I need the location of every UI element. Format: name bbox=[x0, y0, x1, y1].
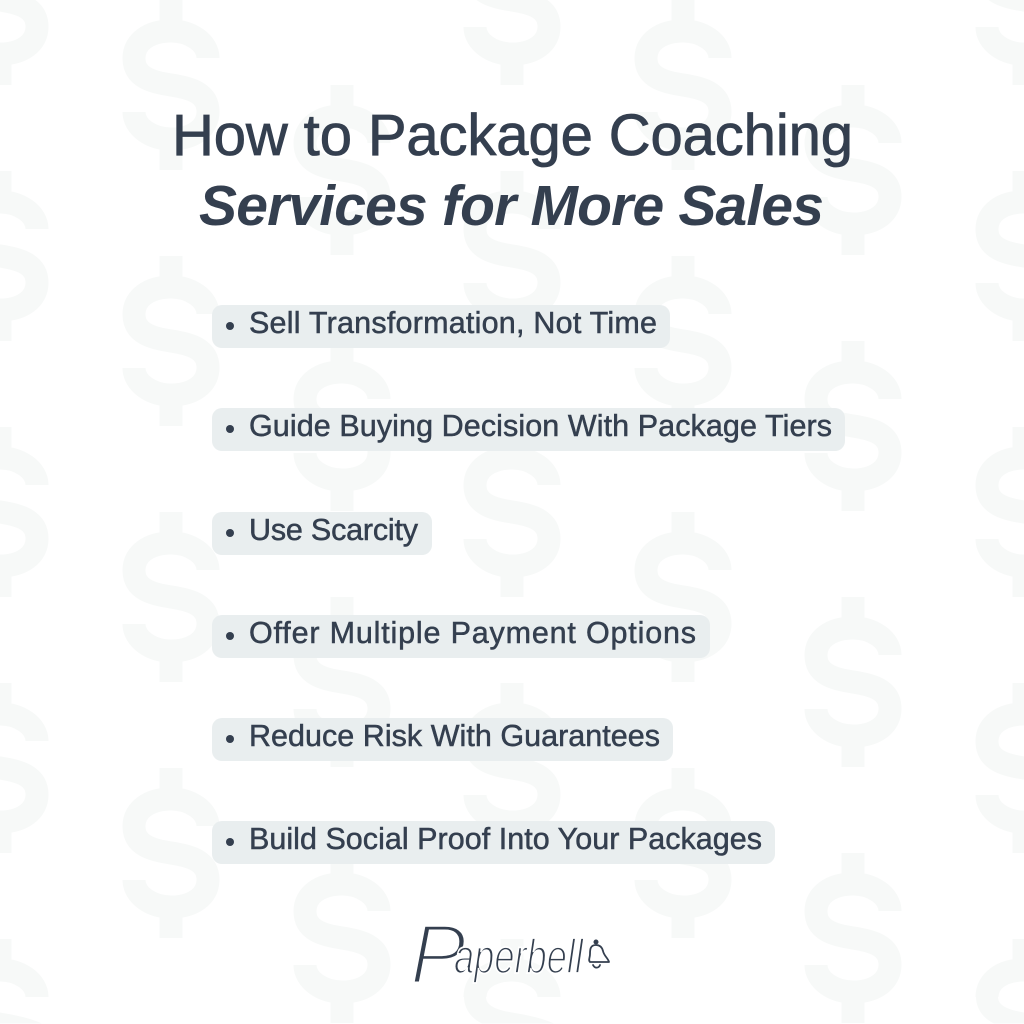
icon: bell bbox=[589, 940, 609, 968]
list item 5: Reduce Risk With Guarantees bbox=[249, 719, 660, 753]
list item 3 bbox=[212, 512, 432, 555]
bullet list bbox=[212, 305, 845, 864]
list item 4: Offer Multiple Payment Options bbox=[249, 616, 696, 650]
title line 1: How to Package Coaching bbox=[172, 103, 853, 168]
list item 1: Sell Transformation, Not Time bbox=[249, 306, 657, 340]
title bbox=[172, 103, 853, 238]
list item 6: Build Social Proof Into Your Packages bbox=[249, 822, 762, 856]
list item 3: Use Scarcity bbox=[249, 513, 419, 547]
list item 2: Guide Buying Decision With Package Tiers bbox=[249, 409, 832, 443]
title line 2: Services for More Sales bbox=[199, 174, 824, 238]
logo initial P: P bbox=[410, 907, 466, 1001]
logo wordmark: aperbell bbox=[454, 931, 584, 984]
logo: Paperbell bbox=[410, 907, 609, 1001]
